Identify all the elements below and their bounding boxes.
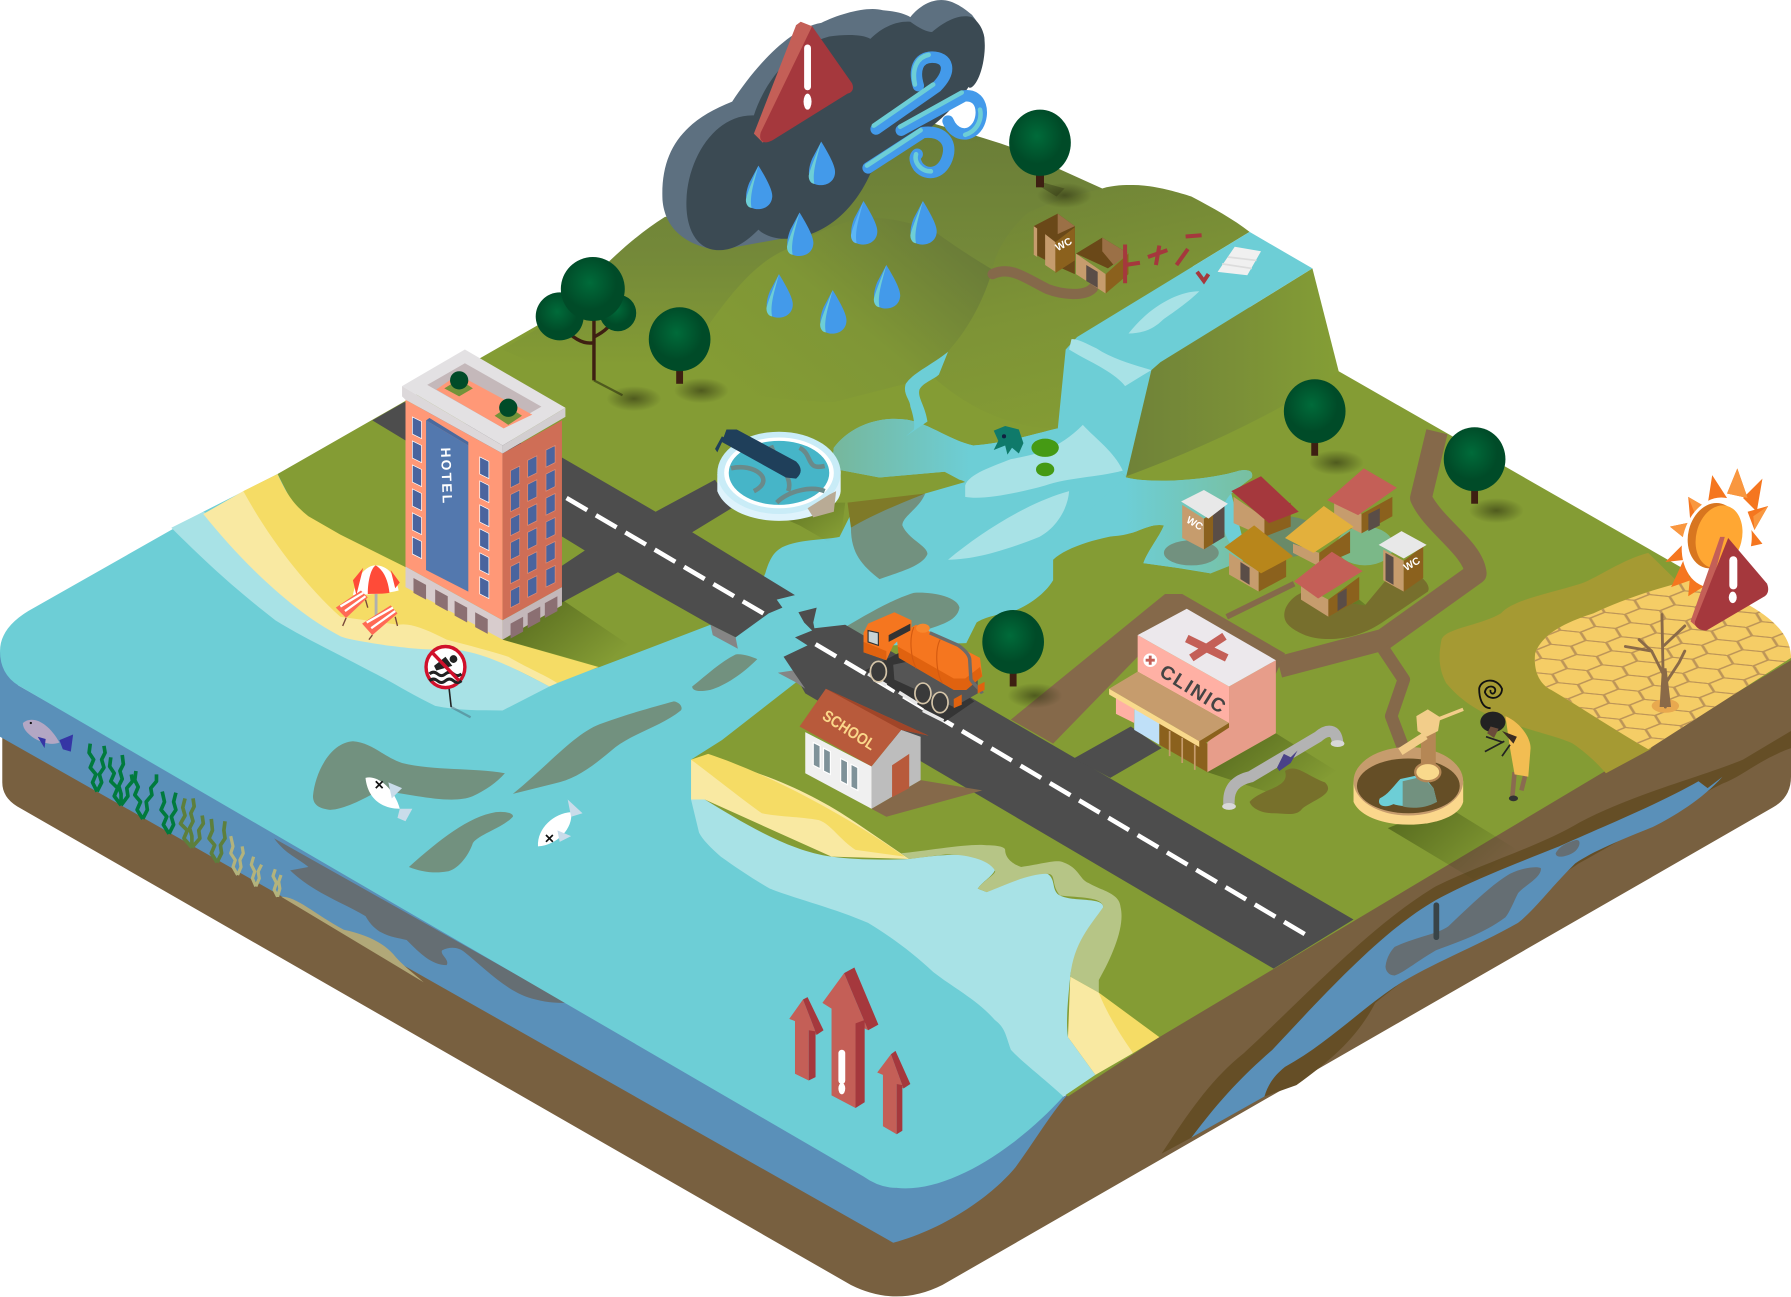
- roof: [402, 350, 565, 445]
- glass entrance: [1134, 706, 1159, 745]
- yellow sand: [243, 474, 599, 683]
- red house right: [1327, 468, 1397, 533]
- tree on right hill: [1284, 379, 1364, 475]
- sea cross-section: [0, 651, 1068, 1243]
- clinic driveway: [1074, 726, 1162, 778]
- bridge pier: [778, 670, 805, 689]
- dead tree: [1625, 615, 1685, 713]
- spilled waste marks: [1125, 235, 1208, 283]
- back hill: [503, 123, 1102, 366]
- groundwater layer: [1162, 731, 1791, 1154]
- clinic plus badge: [1143, 653, 1157, 667]
- large arrow: [822, 967, 878, 1108]
- pale sand: [203, 491, 557, 686]
- tree at back edge: [1444, 427, 1524, 523]
- village pond: [1085, 470, 1252, 573]
- road dashes: [816, 644, 1309, 937]
- school: SCHOOL: [819, 708, 878, 754]
- wide track behind clinic: [1011, 594, 1285, 744]
- school roof: [800, 689, 929, 766]
- tall branching tree: [536, 257, 661, 411]
- light water on lake: [965, 425, 1123, 498]
- paper stack in river: [1218, 247, 1261, 275]
- dark aquifer band: [1162, 731, 1791, 1154]
- sun rays: [1665, 468, 1768, 596]
- north beach: [171, 474, 599, 710]
- hotel: HOTEL: [438, 447, 455, 506]
- stressed seaweed: [180, 798, 225, 862]
- truck chassis: [893, 660, 978, 707]
- purple leak: [1277, 750, 1298, 771]
- brown paths in village: [1011, 432, 1476, 749]
- small stream: [905, 352, 948, 436]
- outhouse left of village: [1181, 490, 1228, 549]
- canopy: [1109, 672, 1229, 741]
- sea level rise arrows: [789, 967, 910, 1134]
- front hill: [674, 218, 993, 402]
- sea and river water: [0, 419, 1252, 1188]
- pollution plume in river: [840, 593, 959, 651]
- toilets on hill: WC: [1054, 236, 1075, 254]
- dizzy spiral: [1479, 681, 1502, 708]
- tree by road: [982, 610, 1062, 708]
- foam: [948, 291, 1199, 560]
- cracked earth: [1535, 577, 1791, 749]
- pollution plume under treatment plant: [848, 493, 927, 579]
- lily pads: [1031, 439, 1059, 476]
- village polluted patches: [1164, 516, 1429, 639]
- well casing: [1433, 902, 1439, 940]
- broken rim: [808, 491, 836, 517]
- corner sand yellow: [1099, 993, 1159, 1053]
- storm warning triangle: [754, 22, 853, 143]
- hill right of waterfall: [1126, 268, 1339, 476]
- flooded land: [901, 845, 1122, 993]
- right wall: [503, 420, 562, 620]
- purple fish: [23, 720, 73, 752]
- waterfall: [948, 232, 1312, 560]
- dirt path on hill: [993, 271, 1093, 294]
- school windows: [813, 742, 858, 790]
- yellow sand: [691, 754, 905, 857]
- hotel windows: [412, 417, 489, 599]
- shoreline shallows: [691, 800, 1103, 1097]
- clinic: CLINIC: [1156, 661, 1229, 718]
- sun: [1665, 468, 1768, 596]
- contaminated well: [1354, 709, 1463, 825]
- deck chair one: [336, 591, 368, 626]
- storm cloud: [662, 0, 985, 250]
- pollution plume in sea two: [513, 701, 682, 794]
- track to well: [1383, 649, 1404, 749]
- sunken pollution in sea cross-section: [274, 838, 567, 1003]
- beach umbrella: [353, 565, 400, 624]
- dying seaweed: [231, 836, 281, 897]
- healthy seaweed: [89, 744, 176, 834]
- left wall: [405, 400, 503, 620]
- main dirt track: [1279, 432, 1476, 667]
- green land surface: [228, 148, 1791, 1097]
- vacuum hose: [930, 633, 982, 693]
- tank bridge arm: [722, 429, 801, 479]
- outhouse left of village: WC: [1184, 515, 1205, 533]
- frog: [994, 426, 1023, 455]
- deck chair two: [362, 605, 397, 640]
- outhouse right of village: WC: [1402, 555, 1423, 574]
- tree beside hotel: [649, 307, 729, 403]
- small plume: [1556, 840, 1580, 857]
- building shadows: [503, 503, 1519, 880]
- track in village: [1227, 584, 1294, 617]
- pollution plume small: [692, 654, 757, 691]
- pollution plume in sea one: [313, 741, 505, 810]
- rooftop bushes: [444, 379, 522, 425]
- roof cross: [1187, 636, 1227, 658]
- river channel: [959, 428, 1126, 537]
- hotel: [402, 350, 565, 640]
- contamination plume in stream: [1386, 867, 1541, 975]
- sludge in tank: [731, 445, 825, 503]
- south beach: [691, 754, 1159, 1097]
- hotel sign: [426, 420, 468, 592]
- ochre house left: [1224, 525, 1293, 592]
- tree near toilets: [1009, 110, 1092, 208]
- yellow house centre: [1285, 506, 1354, 567]
- sediment on seabed: [281, 897, 424, 982]
- pollution plume in sea three: [409, 812, 513, 872]
- pale sand: [691, 760, 909, 859]
- hand pump: [1421, 725, 1436, 774]
- ground floor: [405, 567, 503, 640]
- upper road: [372, 402, 795, 649]
- toilets on hill: [1034, 214, 1129, 294]
- soil base block: [2, 657, 1791, 1296]
- truck wheels: [870, 661, 948, 713]
- leaking pipe: [1222, 731, 1344, 814]
- dead fish two: [538, 800, 583, 846]
- pink side pillar: [1116, 694, 1134, 723]
- sickness marks: [1485, 737, 1510, 756]
- tank: [897, 625, 982, 690]
- school: [800, 689, 929, 809]
- hill beside toilets: [933, 185, 1250, 429]
- right arrow: [877, 1051, 910, 1134]
- water treatment tank: [715, 429, 841, 521]
- water in well: [1379, 774, 1437, 806]
- dead fish one: [366, 777, 412, 821]
- no swimming sign: [426, 647, 471, 717]
- sick woman: [1479, 681, 1531, 801]
- corner sand pale: [1068, 977, 1133, 1075]
- road dashes: [567, 498, 765, 615]
- drought warning triangle: [1690, 537, 1768, 631]
- school door: [892, 754, 909, 797]
- red house front: [1294, 552, 1363, 617]
- dry soil: [1440, 553, 1713, 773]
- oil puddle: [1250, 769, 1328, 814]
- tanker truck: [864, 612, 985, 722]
- left arrow: [789, 997, 824, 1081]
- wind swirls: [867, 55, 981, 172]
- underground stream: [1191, 777, 1722, 1138]
- clinic: [1109, 609, 1276, 772]
- lake under waterfall: [832, 419, 1126, 503]
- truck cab: [864, 612, 911, 660]
- outhouse right of village: [1379, 531, 1427, 592]
- shallow water: [171, 512, 549, 710]
- red house back: [1231, 476, 1299, 537]
- lower road: [778, 608, 1354, 969]
- bridge pier: [710, 625, 738, 649]
- rain drops: [746, 142, 937, 334]
- wood doors: [1159, 720, 1207, 772]
